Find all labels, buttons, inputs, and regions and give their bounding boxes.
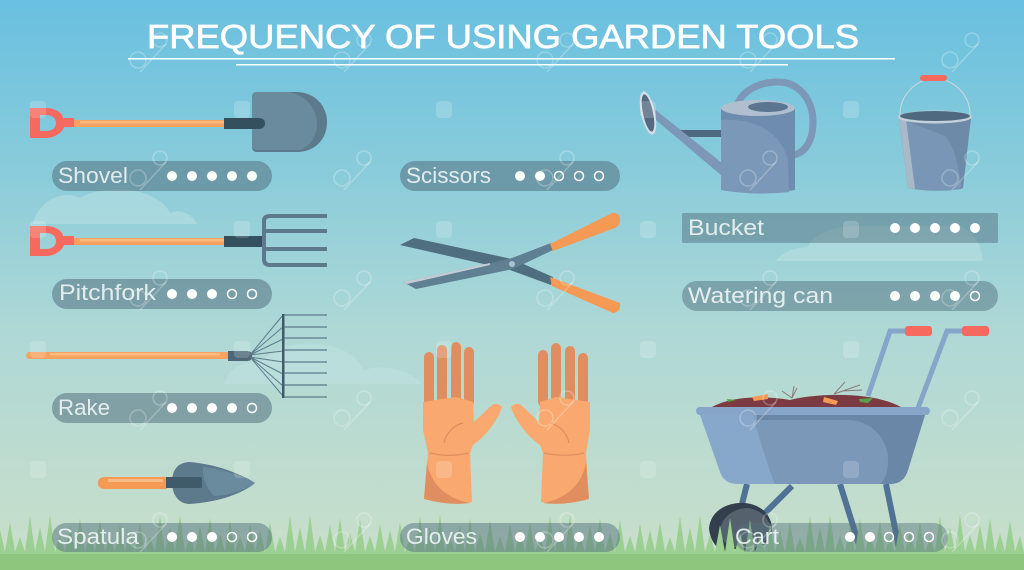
cart rating bbox=[735, 523, 948, 552]
icon: watering can bbox=[637, 82, 813, 194]
grass bbox=[0, 515, 1024, 570]
spatula rating bbox=[52, 523, 272, 552]
rake rating: Rake bbox=[58, 395, 110, 420]
cart rating: Cart bbox=[735, 524, 779, 549]
icon: pitchfork bbox=[30, 216, 327, 265]
icon: spatula trowel bbox=[98, 462, 255, 504]
icon: bucket bbox=[898, 75, 972, 191]
icon: gloves bbox=[423, 347, 590, 504]
watering can rating bbox=[682, 281, 998, 311]
scissors rating bbox=[400, 161, 620, 191]
clouds bbox=[33, 190, 983, 384]
pitchfork rating: Pitchfork bbox=[59, 280, 157, 305]
watermarks bbox=[130, 33, 979, 552]
icon: rake bbox=[26, 314, 327, 398]
gloves rating bbox=[400, 523, 620, 552]
spatula rating: Spatula bbox=[57, 524, 140, 549]
rake rating bbox=[52, 393, 272, 423]
pitchfork rating bbox=[52, 279, 272, 309]
bucket rating: Bucket bbox=[688, 215, 764, 240]
shovel rating bbox=[52, 161, 272, 191]
gloves rating: Gloves bbox=[406, 524, 477, 549]
icon: scissors bbox=[400, 213, 620, 313]
scissors rating: Scissors bbox=[406, 163, 491, 188]
watering can rating: Watering can bbox=[688, 283, 833, 308]
shovel rating: Shovel bbox=[58, 163, 128, 188]
title: FREQUENCY OF USING GARDEN TOOLS bbox=[147, 18, 859, 55]
bucket rating bbox=[682, 213, 998, 243]
icon: shovel bbox=[30, 92, 327, 152]
icon: wheelbarrow cart bbox=[696, 326, 989, 556]
